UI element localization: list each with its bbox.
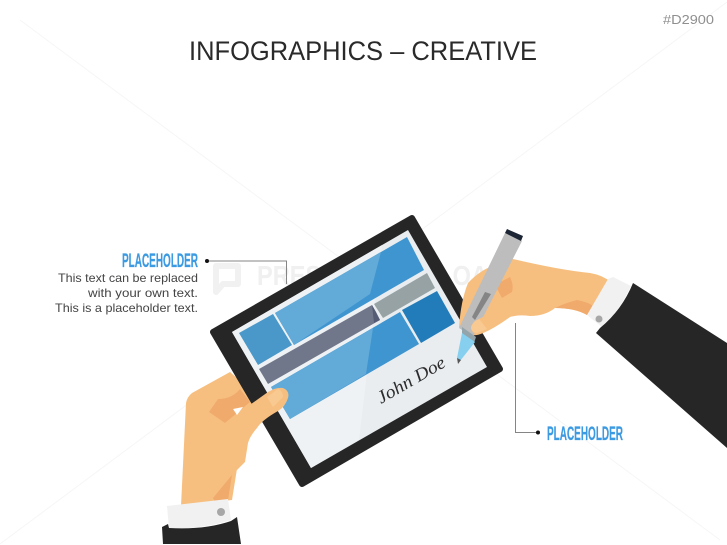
right cuff [587,277,631,327]
right cuff button [596,316,602,322]
illustration: left hand holding tablet, back [181,372,262,506]
left cuff button [217,508,225,516]
left cuff [167,499,231,528]
right callout heading: PLACEHOLDER [547,423,623,445]
title: INFOGRAPHICS – CREATIVE [189,36,537,66]
left sleeve [162,517,241,544]
left leader line [205,259,286,284]
watermark: PRESENTATIONLOAD [257,260,505,291]
tablet screen [232,230,487,468]
right sleeve [596,283,727,448]
right hand [459,259,611,335]
left callout [55,250,198,315]
right finger [471,300,512,334]
right hand shade [495,277,513,298]
right leader line [516,323,540,434]
left callout heading: PLACEHOLDER [122,250,198,272]
left hand thumb [215,388,288,475]
left callout text: This is a placeholder text. [55,301,198,315]
pen tip [457,333,475,361]
signature: John Doe [373,352,449,407]
pen cap [505,229,523,241]
left callout text: with your own text. [87,286,198,300]
left callout text: This text can be replaced [58,271,198,285]
pen [457,229,523,364]
left callout text [55,271,198,315]
screen tiles [239,237,455,419]
tablet [213,218,500,484]
pen grip [472,292,491,320]
left hand shade [209,389,250,423]
product code: #D2900 [663,13,714,27]
